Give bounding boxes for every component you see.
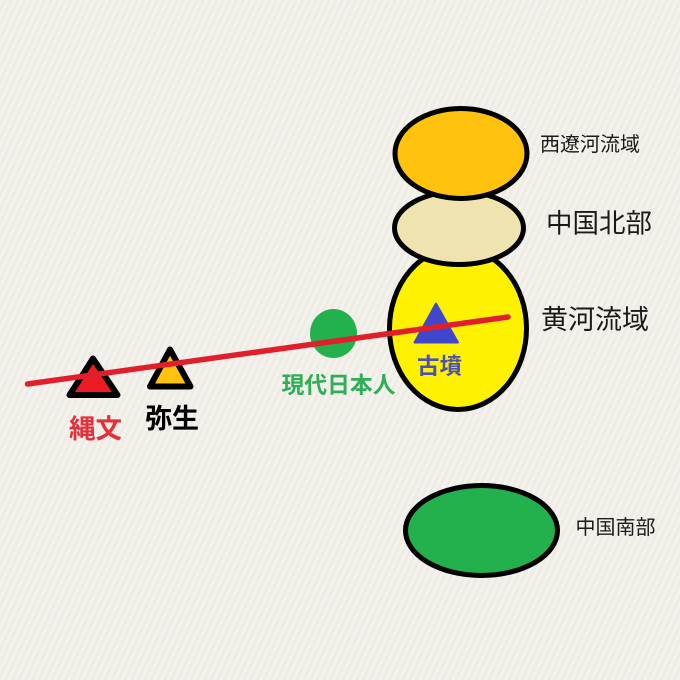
region: Yellow River basin ellipse bbox=[390, 248, 526, 410]
region: West Liao River basin ellipse bbox=[395, 108, 527, 198]
label: modern Japanese: 現代日本人 bbox=[282, 372, 396, 398]
label: northern China: 中国北部 bbox=[546, 208, 652, 238]
label: southern China: 中国南部 bbox=[576, 516, 656, 539]
label: Jomon: 縄文 bbox=[69, 414, 122, 444]
label: West Liao River basin: 西遼河流域 bbox=[540, 133, 640, 156]
marker: modern Japanese green dot bbox=[310, 309, 357, 358]
trend line: red axis bbox=[28, 317, 508, 384]
label: Yayoi: 弥生 bbox=[145, 404, 199, 434]
region: southern China ellipse bbox=[406, 486, 558, 576]
marker: Jomon red triangle bbox=[70, 358, 118, 395]
marker: Kofun blue triangle bbox=[414, 304, 458, 342]
marker: Yayoi orange triangle bbox=[150, 350, 190, 386]
label: Kofun: 古墳 bbox=[417, 354, 462, 379]
label: Yellow River basin: 黄河流域 bbox=[541, 305, 649, 335]
region: northern China ellipse bbox=[394, 192, 524, 264]
